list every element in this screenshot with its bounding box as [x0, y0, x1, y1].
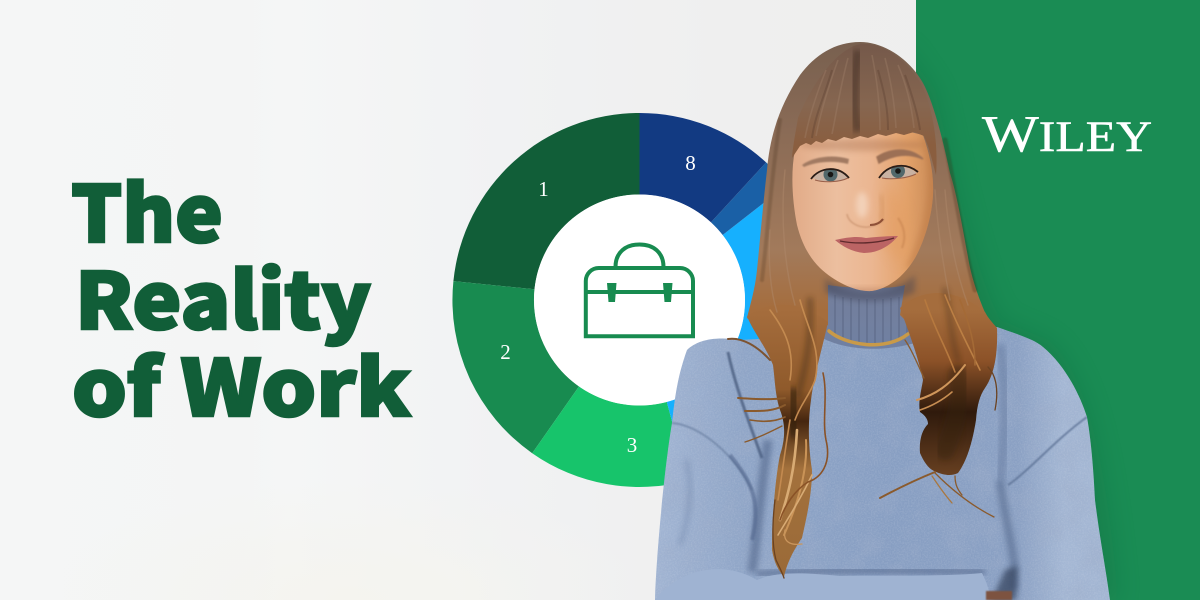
- segment 1: [453, 113, 640, 289]
- segment numbers: 1: [538, 177, 549, 201]
- segment numbers: 3: [627, 433, 637, 457]
- eyebrow left: [802, 157, 849, 167]
- title line 2: Reality: [75, 240, 371, 352]
- title line 3: of Work: [72, 327, 412, 439]
- lips: [835, 236, 898, 253]
- segment 3: [532, 386, 688, 487]
- hair left lock: [747, 305, 828, 577]
- fringe: [792, 44, 937, 175]
- hair upper mass: [747, 42, 997, 350]
- eyebrow right: [877, 150, 923, 163]
- icon: briefcase: [586, 244, 693, 336]
- title: [71, 153, 412, 439]
- face shading: [802, 138, 933, 291]
- segment 6: [667, 185, 827, 481]
- segment numbers: 8: [685, 151, 696, 175]
- face: [792, 132, 934, 292]
- brand panel: [916, 0, 1200, 600]
- sweater folds: [672, 345, 1087, 590]
- neck shadow: [825, 275, 915, 302]
- sweater: [650, 320, 1120, 600]
- turtleneck ribbing: [835, 295, 907, 343]
- side hair dark depth: [762, 120, 975, 450]
- sweater mottling: [1102, 552, 1104, 556]
- flyaway strands: [728, 339, 997, 578]
- segment 2: [452, 281, 579, 453]
- segment numbers: 2: [500, 340, 511, 364]
- turtleneck: [820, 268, 925, 349]
- segment 8: [640, 113, 766, 222]
- donut centre: [534, 194, 745, 406]
- donut chart: [452, 113, 827, 487]
- segment 7: [711, 162, 787, 235]
- logo: Wiley: WILEY: [982, 106, 1152, 163]
- sweater texture: [650, 320, 1120, 600]
- hair light strands: [770, 295, 980, 535]
- soft shadow on green panel: [974, 274, 1108, 582]
- necklace: [829, 331, 908, 345]
- right sleeve shadow: [992, 566, 1017, 600]
- smile line: [898, 218, 904, 248]
- nose: [847, 192, 884, 227]
- crossed forearm: [655, 569, 989, 600]
- hair right lock: [900, 293, 997, 475]
- hand glimpse: [986, 591, 1012, 600]
- eye left: [811, 168, 849, 182]
- upper hair faint strands: [769, 170, 968, 312]
- title line 1: The: [71, 153, 223, 265]
- person portrait: [650, 40, 1120, 600]
- eye right: [879, 164, 918, 179]
- segment numbers: [500, 151, 696, 457]
